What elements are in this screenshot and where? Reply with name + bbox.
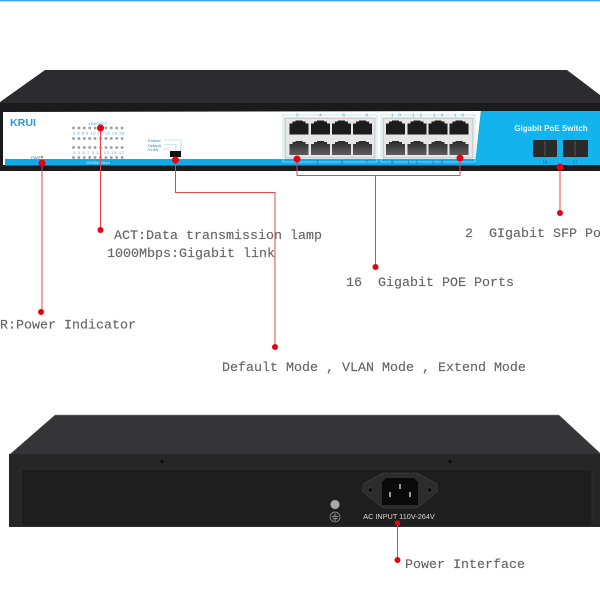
callout: data transmission lamp	[97, 124, 322, 262]
port group 1: 2 4 6 8	[296, 112, 368, 118]
port group 1: 3 5 7	[316, 160, 368, 164]
LED indicator block: 1 3 5 7 9 11 13 15 17	[73, 150, 125, 155]
top face of front switch	[0, 70, 600, 104]
PWR label: PWR	[31, 155, 40, 160]
top face of rear switch	[9, 415, 600, 455]
rear face of switch	[9, 454, 600, 527]
PWR LED	[41, 156, 43, 158]
front switch device	[0, 70, 600, 171]
Gigabit PoE Switch label: Gigabit PoE Switch	[514, 124, 588, 133]
top blue rule	[0, 0, 600, 1]
AC input label: AC INPUT 110V-264V	[363, 512, 435, 521]
port group 2	[381, 112, 475, 164]
mode switch labels: Extend	[148, 138, 160, 143]
SFP port 16	[533, 140, 557, 157]
rear switch device	[9, 415, 600, 527]
mode switch	[170, 151, 181, 157]
mode switch labels: VLAN	[148, 147, 159, 152]
front face of switch	[0, 103, 600, 171]
port group 2: 10 12 14 16	[391, 112, 464, 118]
mode switch labels	[148, 138, 181, 152]
callout: power indicator	[0, 160, 136, 334]
LED indicator block	[73, 121, 125, 165]
LED indicator block: LINK/ACT	[89, 121, 108, 126]
port group 1	[283, 112, 377, 164]
LED indicator block: 2 4 6 8 10 12 14 16 18	[73, 130, 125, 136]
callout: SFP ports	[465, 164, 600, 242]
power socket	[363, 473, 437, 508]
callout: data transmission lamp: ACT:Data transmission lamp	[114, 229, 322, 244]
front panel white area	[3, 111, 481, 165]
SFP numbers: 16	[542, 160, 548, 164]
callout: mode switch	[172, 156, 526, 376]
LED indicator block: 1000M/ Mbps	[86, 160, 110, 165]
rear screws	[160, 460, 164, 463]
front switch device: 17	[572, 160, 578, 164]
callout: POE ports: 16 Gigabit POE Ports	[346, 276, 514, 291]
brand logo: KRUI	[10, 118, 36, 129]
callout: mode switch: Default Mode , VLAN Mode , Extend Mode	[222, 361, 526, 376]
rear inner panel	[21, 469, 592, 526]
blue right panel	[475, 111, 600, 165]
callout: POE ports	[294, 154, 514, 291]
mode switch labels: Default	[148, 143, 162, 148]
callout: data transmission lamp: 1000Mbps:Gigabit link	[107, 247, 275, 262]
callout: power interface: Power Interface	[405, 558, 525, 573]
port group 2: 9 11 13	[391, 160, 443, 164]
ground symbol	[330, 512, 340, 522]
ground screw	[330, 500, 340, 509]
callout: power interface	[394, 520, 525, 573]
SFP port 17	[563, 140, 588, 157]
blue bottom strip	[5, 159, 480, 166]
